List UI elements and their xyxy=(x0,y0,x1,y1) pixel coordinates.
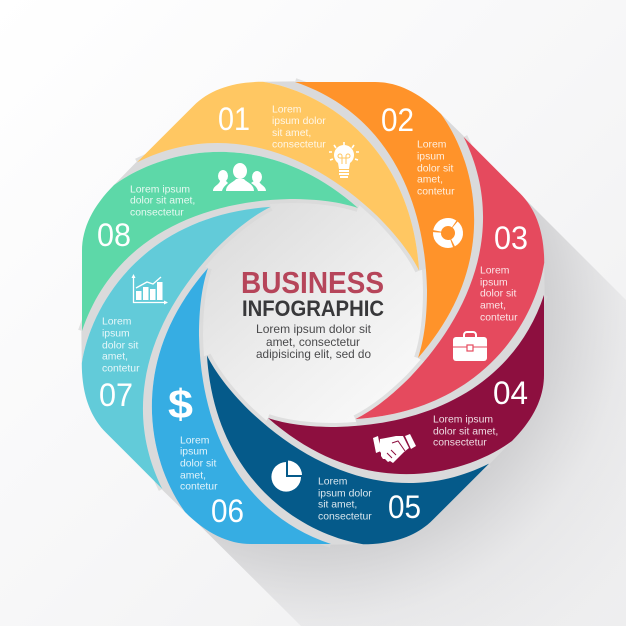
panel: 03 red xyxy=(268,137,590,459)
icon: pie chart xyxy=(271,460,302,492)
panel: 02 orange xyxy=(295,82,474,358)
text 02: ipsum xyxy=(417,152,445,162)
text 07: contetur xyxy=(102,364,140,374)
text 04: consectetur xyxy=(433,438,487,448)
text 07: amet, xyxy=(102,352,128,362)
text 06: contetur xyxy=(180,482,218,492)
panel: 07 teal xyxy=(36,167,358,489)
number 07: 07 xyxy=(99,377,133,413)
title block xyxy=(241,265,384,361)
blade separators xyxy=(52,52,574,574)
text 03: contetur xyxy=(480,312,518,324)
text 06: Lorem xyxy=(180,436,209,446)
number 05: 05 xyxy=(388,489,421,525)
soft inner edge shadows xyxy=(69,69,557,557)
icon: light bulb xyxy=(329,142,359,178)
panel: 01 yellow xyxy=(137,36,459,358)
text 06: ipsum xyxy=(180,446,208,458)
number 02: 02 xyxy=(381,102,414,138)
text 02: contetur xyxy=(417,186,455,198)
text 08: dolor sit amet, xyxy=(130,196,195,206)
panel: 04 maroon xyxy=(268,295,544,474)
text 01: consectetur xyxy=(272,140,326,150)
heading: infographic: INFOGRAPHIC xyxy=(242,296,384,321)
text 04: Lorem ipsum xyxy=(433,414,493,426)
icon: handshake xyxy=(373,434,416,463)
number 01: 01 xyxy=(218,101,250,137)
text 02: dolor sit xyxy=(417,164,453,174)
icon: people xyxy=(213,163,266,191)
number 03: 03 xyxy=(494,220,528,256)
text 05: Lorem xyxy=(318,476,347,488)
text 06: amet, xyxy=(180,470,206,482)
icon: briefcase xyxy=(453,332,487,361)
panel: 06 blue xyxy=(152,268,331,544)
center disc xyxy=(173,173,453,453)
text 04: dolor sit amet, xyxy=(433,426,498,438)
text 03: ipsum xyxy=(480,278,508,288)
number 06: 06 xyxy=(211,493,244,529)
panel: 05 navy xyxy=(167,268,489,590)
text 03: dolor sit xyxy=(480,288,516,300)
body text: adipisicing elit, sed do xyxy=(256,347,371,361)
text 01: sit amet, xyxy=(272,128,311,139)
text 03: amet, xyxy=(480,300,506,312)
text 06: dolor sit xyxy=(180,458,216,470)
text 07: Lorem xyxy=(102,316,131,328)
heading: business: BUSINESS xyxy=(241,265,384,300)
body text: Lorem ipsum dolor sit xyxy=(256,322,372,336)
text 07: ipsum xyxy=(102,328,130,340)
text 08: consectetur xyxy=(130,208,184,218)
text 05: ipsum dolor xyxy=(318,488,372,500)
text 02: amet, xyxy=(417,174,443,186)
text 03: Lorem xyxy=(480,266,509,276)
text 01: ipsum dolor xyxy=(272,116,326,127)
icon: dollar: $ xyxy=(168,381,193,427)
body text: amet, consectetur xyxy=(266,335,360,349)
long shadow xyxy=(149,149,626,626)
text 08: Lorem ipsum xyxy=(130,184,190,196)
text 07: dolor sit xyxy=(102,340,138,352)
text 05: consectetur xyxy=(318,512,372,522)
number 04: 04 xyxy=(493,375,528,411)
panel: 08 green xyxy=(82,152,358,331)
text 02: Lorem xyxy=(417,140,446,150)
number 08: 08 xyxy=(97,217,131,253)
icon: cycle xyxy=(433,218,463,248)
text 05: sit amet, xyxy=(318,500,357,510)
text 01: Lorem xyxy=(272,104,301,116)
icon: bar chart xyxy=(132,274,168,304)
